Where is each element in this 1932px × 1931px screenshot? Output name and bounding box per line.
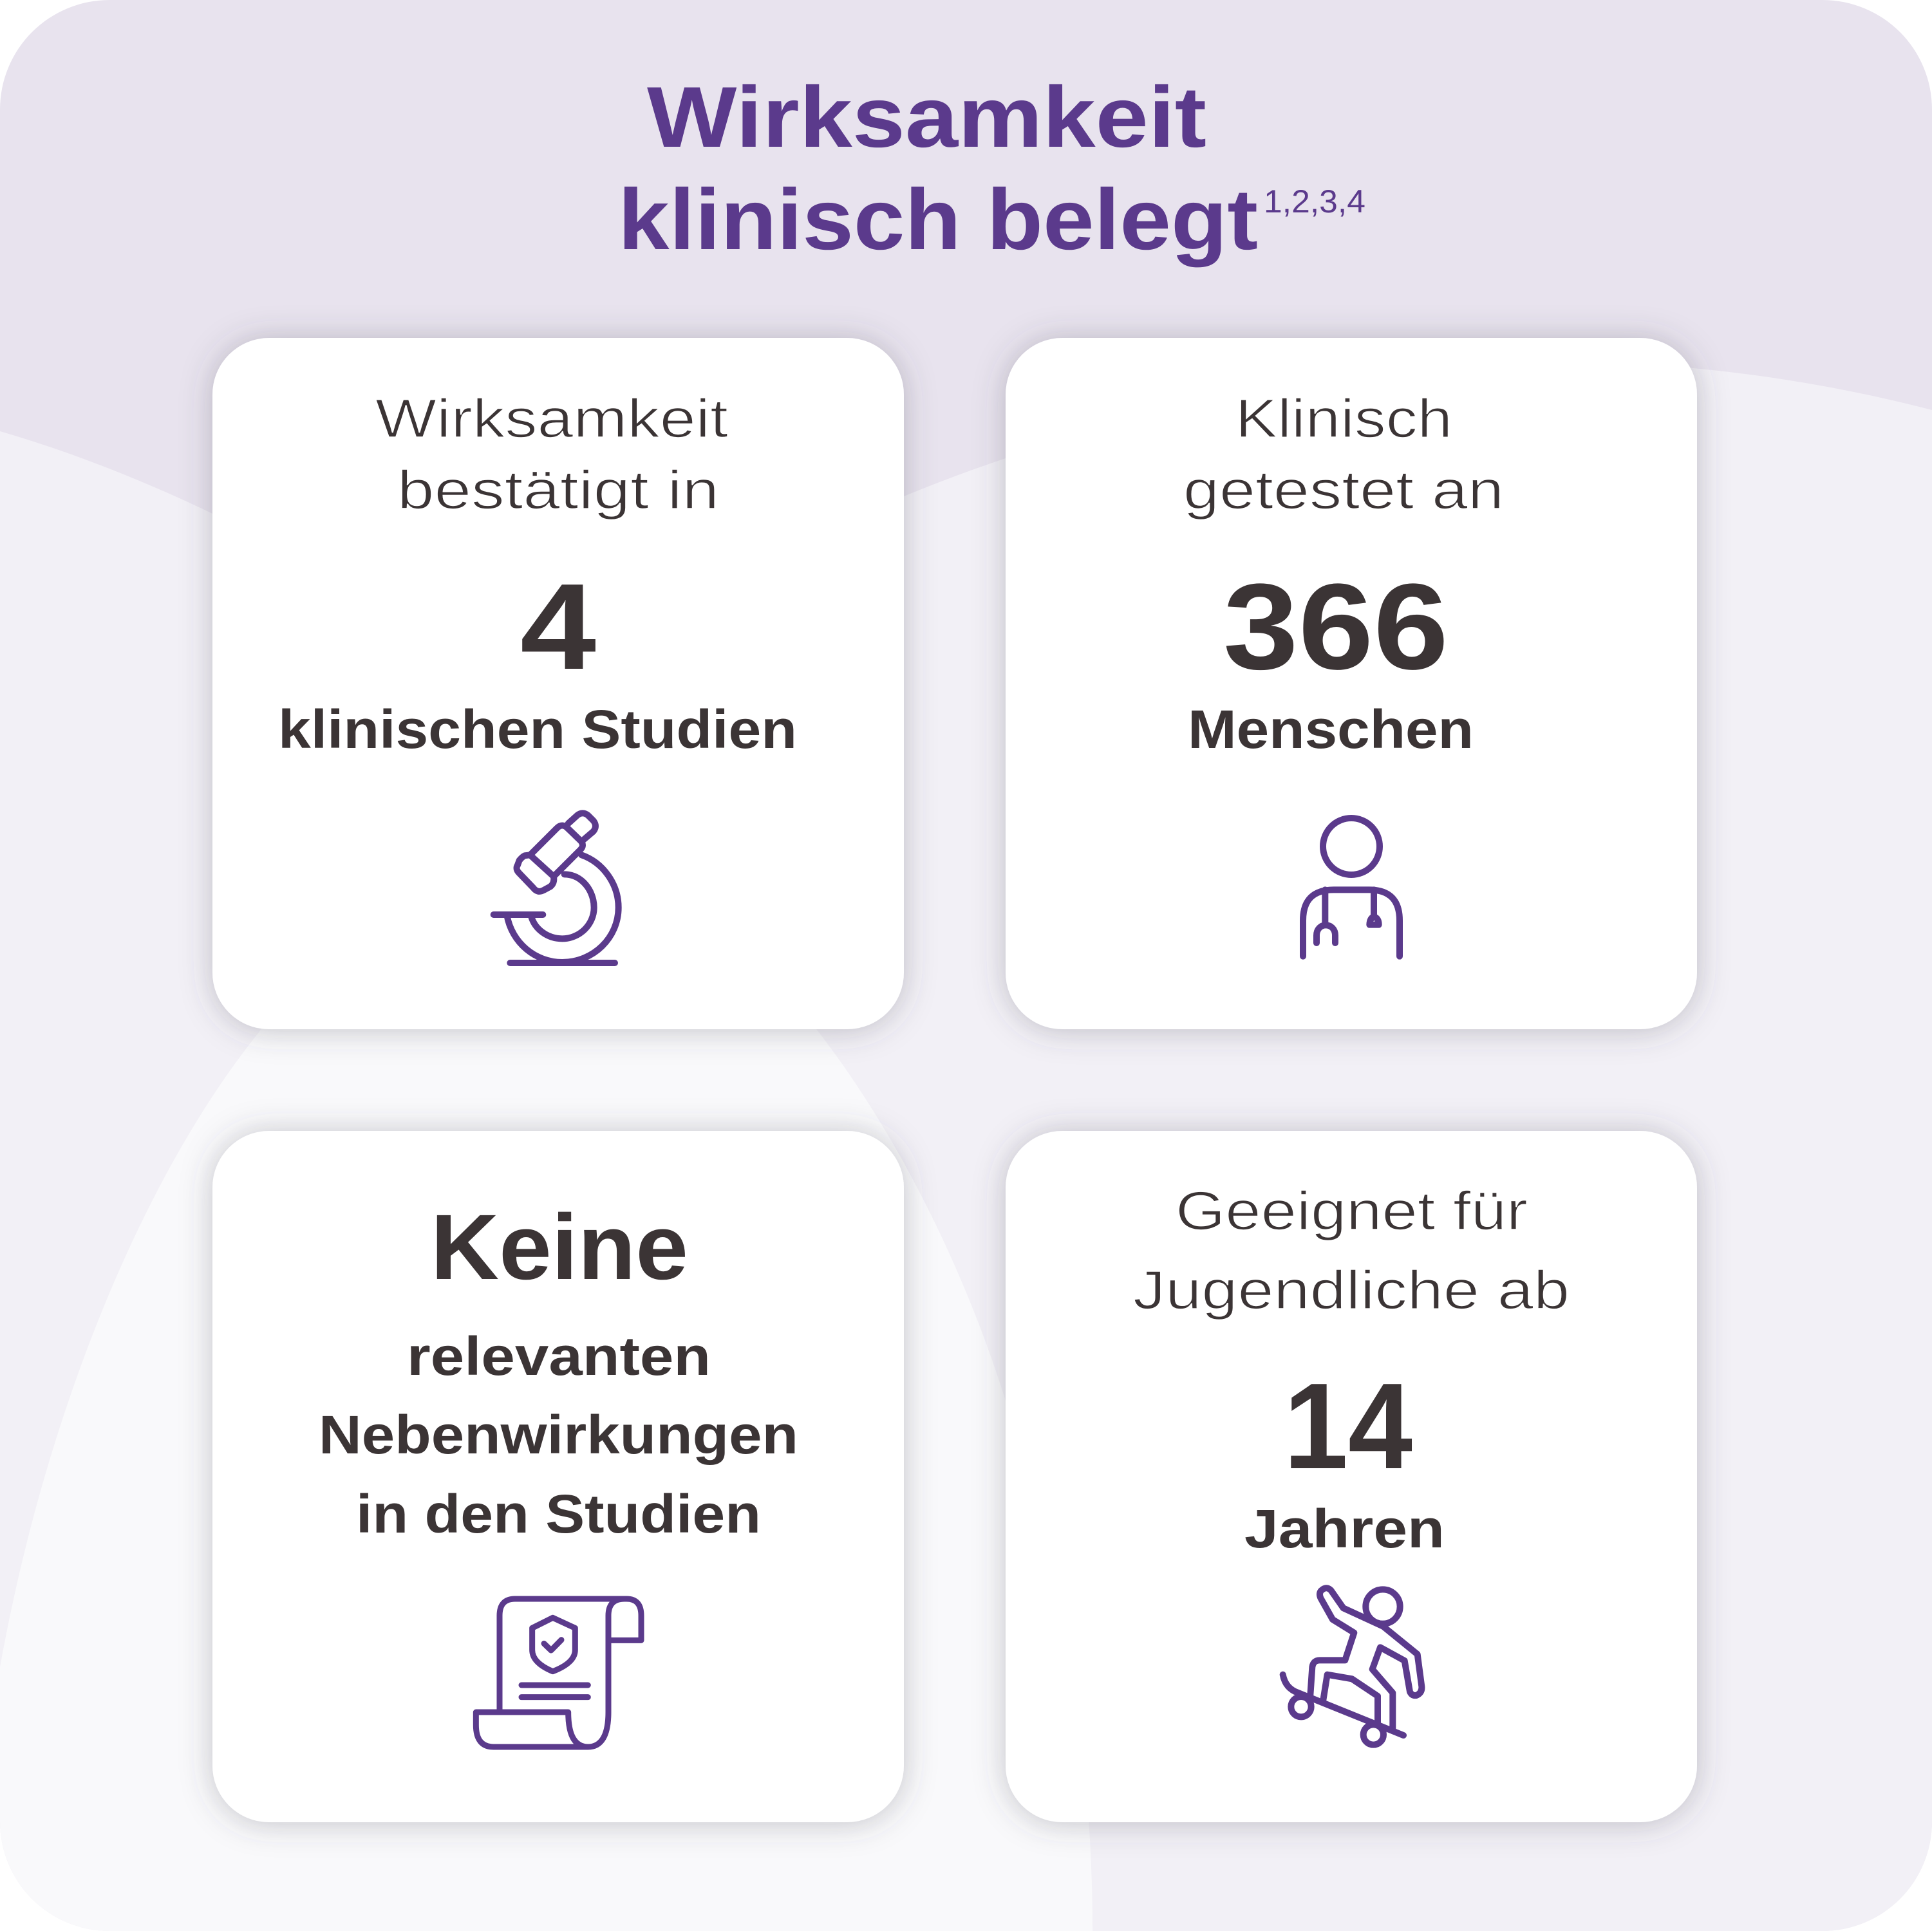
text: Keine: Keine <box>431 1195 688 1299</box>
title <box>618 70 1365 268</box>
icon: skateboarder <box>1283 1588 1421 1745</box>
icon: certificate scroll <box>476 1599 641 1747</box>
number: 14: 14 <box>1284 1358 1412 1495</box>
text: relevanten Nebenwirkungen in den Studien: relevanten <box>407 1326 711 1386</box>
icon: doctor <box>1303 818 1400 956</box>
text: Klinisch getestet an <box>1183 388 1504 520</box>
text: klinischen Studien: klinischen Studien <box>278 699 797 760</box>
panel: keine Nebenwirkungen <box>212 1131 904 1822</box>
text: Geeignet für Jugendliche ab: Geeignet für <box>1176 1180 1528 1241</box>
text: Wirksamkeit bestätigt in <box>375 388 728 520</box>
title: Wirksamkeit <box>647 70 1206 165</box>
icon: microscope <box>494 813 619 963</box>
text: Menschen: Menschen <box>1188 699 1474 760</box>
text: relevanten Nebenwirkungen in den Studien: Nebenwirkungen <box>319 1404 798 1465</box>
text: Wirksamkeit bestätigt in: Wirksamkeit <box>375 388 728 449</box>
panel: klinische Studien <box>212 338 904 1029</box>
panel: Menschen <box>1006 338 1697 1029</box>
text: relevanten Nebenwirkungen in den Studien <box>319 1326 798 1544</box>
title: 1,2,3,4 <box>1264 183 1365 219</box>
text: relevanten Nebenwirkungen in den Studien: in den Studien <box>356 1484 761 1544</box>
text: Geeignet für Jugendliche ab: Jugendliche ab <box>1133 1260 1570 1320</box>
title: klinisch belegt <box>618 172 1258 268</box>
number: 4: 4 <box>520 559 596 695</box>
text: Geeignet für Jugendliche ab <box>1133 1180 1570 1320</box>
text: Klinisch getestet an: getestet an <box>1183 460 1504 520</box>
text: Wirksamkeit bestätigt in: bestätigt in <box>397 460 719 520</box>
text: Klinisch getestet an: Klinisch <box>1235 388 1452 449</box>
panel: Jugendliche ab 14 Jahren <box>1006 1131 1697 1822</box>
text: Jahren: Jahren <box>1244 1498 1445 1559</box>
number: 366: 366 <box>1223 559 1449 695</box>
